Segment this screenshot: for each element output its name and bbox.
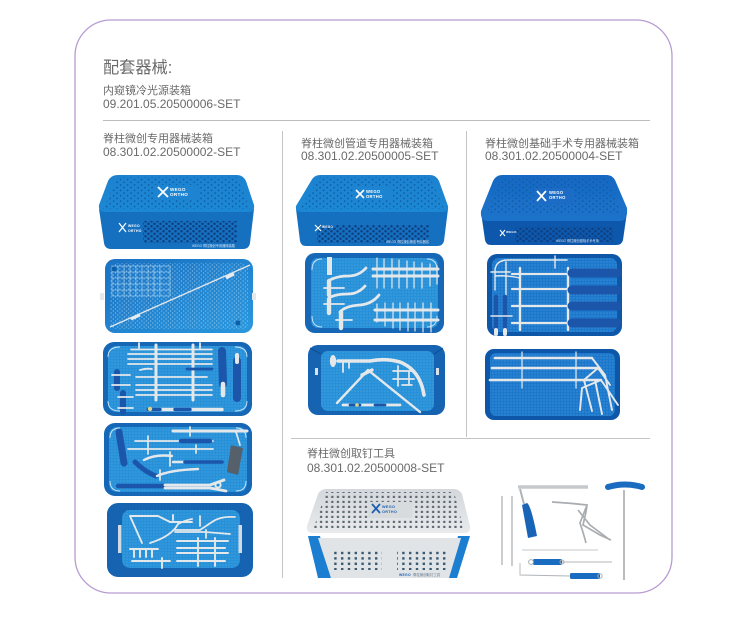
divider: column 2-3: [466, 131, 468, 437]
bottom set label: 脊柱微创取钉工具: [307, 446, 395, 460]
rounded purple frame: [75, 20, 672, 593]
column 1 label: 08.301.02.20500002-SET: [103, 145, 241, 159]
tool: L bar with blue handle: [518, 487, 588, 538]
closed case: column 1: ORTHO: [170, 192, 188, 197]
tool: long thin rod: [522, 549, 598, 551]
text block: 内窥镜冷光源装箱: 09.201.05.20500006-SET: [103, 97, 241, 111]
closed silver case: bottom set: WEGO: [382, 505, 395, 509]
closed case: column 2: WEGO: [322, 225, 334, 229]
closed case: column 1: WEGO: [128, 224, 140, 228]
column 3 label: 脊柱微创基础手术专用器械装箱: [485, 136, 639, 150]
column 2 label: 08.301.02.20500005-SET: [301, 149, 439, 163]
bottom set label: [307, 446, 445, 475]
column 3 label: 08.301.02.20500004-SET: [485, 149, 623, 163]
closed silver case: bottom set: [307, 489, 470, 578]
tools: instrument set: [502, 484, 642, 580]
closed case: column 2: WEGO: [366, 189, 381, 194]
closed silver case: bottom set: 脊柱微创取钉工具: [413, 572, 441, 577]
closed case: column 1: [99, 175, 254, 249]
divider: column 1-2: [282, 131, 284, 578]
bottom set label: 08.301.02.20500008-SET: [307, 461, 445, 475]
closed case: column 3: ORTHO: [549, 195, 566, 200]
tray: column 2 tubes and hooks: [305, 253, 444, 333]
column 3 label: [485, 136, 639, 163]
closed case: column 1: WEGO 脊柱微创专用器械装箱: [192, 243, 236, 248]
closed case: column 3: WEGO: [506, 230, 517, 234]
divider: horizontal lower: [291, 438, 650, 440]
column 1 label: 脊柱微创专用器械装箱: [103, 131, 213, 145]
closed silver case: bottom set: ORTHO: [382, 510, 397, 514]
text block: 内窥镜冷光源装箱: [103, 83, 241, 111]
tool: thin rods: [502, 496, 512, 566]
column 2 label: 脊柱微创管道专用器械装箱: [301, 136, 433, 150]
column 2 label: [301, 136, 439, 163]
closed case: column 1: ORTHO: [128, 229, 142, 233]
tool: hook handle upper: [529, 559, 612, 565]
tool: rongeur: [552, 502, 611, 543]
closed silver case: bottom set: WEGO: [399, 573, 411, 577]
closed case: column 1: WEGO: [170, 187, 186, 192]
tool: T handle: [608, 484, 642, 580]
tray: column 1 lid with long rod: [100, 259, 256, 333]
tray: column 1 forceps: [107, 503, 253, 577]
closed case: column 2: ORTHO: [366, 194, 383, 199]
tray: column 3 handles: [487, 254, 622, 336]
tray: column 1 rods and handles: [103, 342, 252, 416]
closed case: column 3: WEGO 脊柱微创基础手术专用: [556, 238, 599, 243]
tool: hook handle lower: [520, 563, 602, 579]
tray: column 3 rongeurs: [485, 349, 620, 420]
text block: 内窥镜冷光源装箱: 内窥镜冷光源装箱: [103, 83, 191, 97]
closed case: column 3: WEGO: [549, 190, 564, 195]
divider: horizontal top: [103, 120, 650, 122]
closed case: column 3: [481, 175, 627, 245]
tray: column 2 curved scope: [308, 345, 445, 415]
closed case: column 2: [296, 175, 448, 246]
tray: column 1 pliers and grey handle: [104, 423, 252, 496]
closed case: column 2: WEGO 脊柱微创管道专用器械: [386, 239, 430, 244]
heading: 配套器械: 配套器械:: [103, 59, 172, 77]
column 1 label: [103, 131, 241, 159]
